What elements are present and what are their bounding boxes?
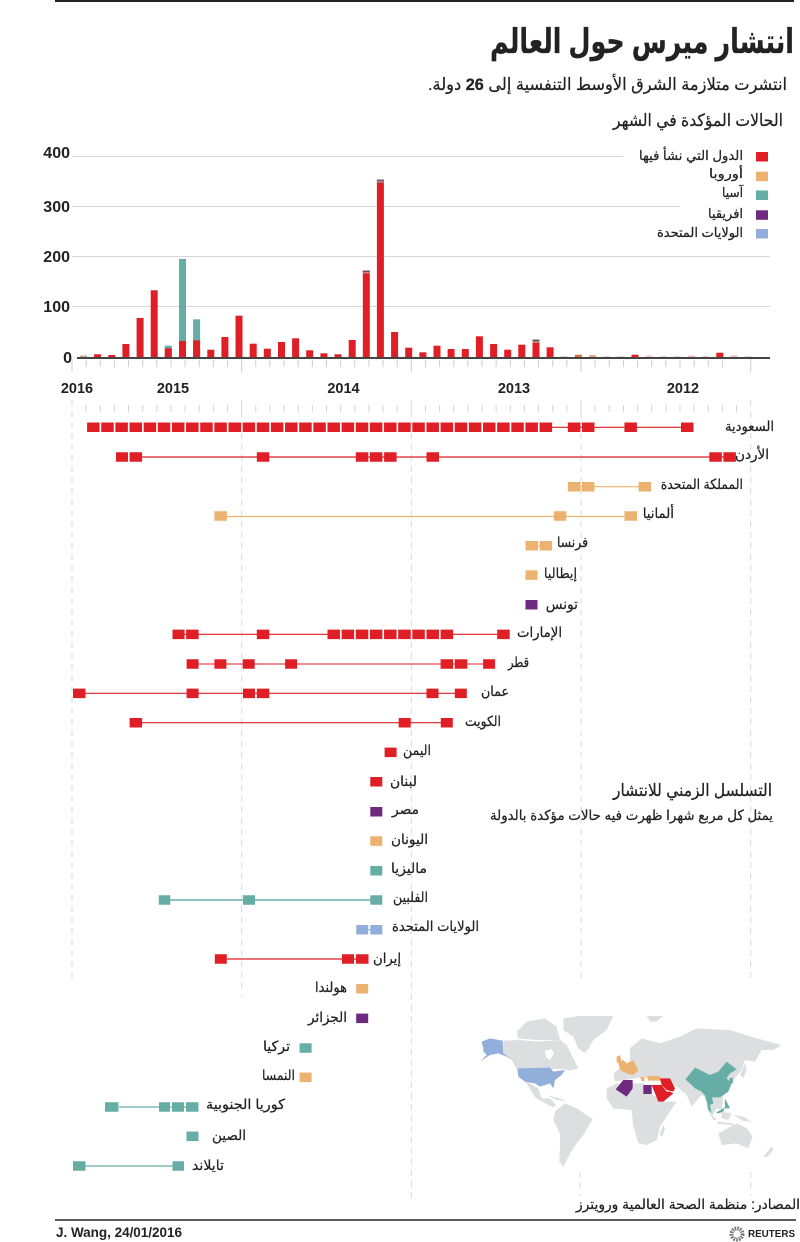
x axis baseline — [77, 357, 770, 359]
row: Saudi Arabia: السعودية — [725, 418, 774, 435]
row: South Korea — [105, 1096, 285, 1113]
year labels: 2016 — [61, 381, 93, 397]
panel: spread timeline — [72, 400, 774, 1200]
row: Kuwait: الكويت — [465, 713, 501, 730]
row: Greece: اليونان — [391, 831, 428, 848]
y axis labels: 300 — [43, 199, 70, 216]
chart heading: الحالات المؤكدة في الشهر — [612, 111, 783, 131]
row: South Korea: كوريا الجنوبية — [206, 1096, 285, 1113]
row: Malaysia: ماليزيا — [391, 860, 427, 877]
row: Qatar: قطر — [507, 654, 529, 671]
row: Netherlands: هولندا — [315, 979, 347, 996]
y axis labels: 100 — [43, 299, 70, 316]
row: United Kingdom — [568, 476, 743, 492]
row: Oman — [73, 683, 509, 699]
year labels: 2013 — [498, 381, 530, 397]
row: Egypt: مصر — [391, 801, 419, 818]
timeline explanation: يمثل كل مربع شهرا ظهرت فيه حالات مؤكدة بالدولة — [490, 807, 773, 824]
legend — [639, 146, 768, 241]
month ticks — [72, 359, 751, 372]
row: United States: الولايات المتحدة — [392, 918, 479, 935]
year labels: 2014 — [327, 381, 360, 397]
row: Iran: إيران — [373, 950, 401, 967]
row: Tunisia — [526, 596, 578, 613]
row: Tunisia: تونس — [546, 596, 578, 613]
legend: الولايات المتحدة — [657, 225, 743, 241]
y axis labels — [43, 145, 72, 367]
row: Germany — [214, 504, 674, 521]
sources: المصادر: منظمة الصحة العالمية ورويترز — [575, 1196, 800, 1213]
row: Italy — [526, 565, 577, 582]
row: Austria: النمسا — [262, 1067, 295, 1083]
legend: افريقيا — [708, 206, 743, 222]
y axis labels: 400 — [43, 145, 70, 162]
row: Philippines: الفلبين — [393, 889, 428, 906]
row: Yemen: اليمن — [403, 742, 431, 759]
y axis labels: 200 — [43, 249, 70, 266]
row: Lebanon: لبنان — [390, 773, 417, 789]
row: Thailand: تايلاند — [192, 1157, 224, 1173]
timeline heading: التسلسل الزمني للانتشار — [612, 781, 772, 801]
bar chart — [80, 180, 752, 357]
row: Jordan: الأردن — [735, 445, 769, 463]
row: Greece — [370, 831, 428, 848]
world map — [463, 1013, 787, 1170]
icon: Reuters logo: REUTERS — [748, 1229, 795, 1240]
row: Philippines — [159, 889, 428, 906]
year labels: 2015 — [157, 381, 189, 397]
row: Netherlands — [315, 979, 368, 996]
timeline ticks — [86, 405, 737, 412]
row: China — [186, 1127, 246, 1144]
credit: J. Wang, 24/01/2016 — [56, 1225, 182, 1240]
row: France — [526, 534, 588, 551]
row: Italy: إيطاليا — [544, 565, 577, 582]
year labels — [61, 381, 699, 397]
row: Qatar — [187, 654, 529, 671]
row: Thailand — [73, 1157, 224, 1173]
row: Saudi Arabia — [87, 418, 774, 435]
grid lines — [72, 156, 770, 306]
legend: أوروبا — [709, 165, 743, 182]
y axis labels: 0 — [63, 350, 72, 367]
row: Jordan — [116, 445, 769, 463]
legend: آسيا — [722, 184, 744, 200]
row: Kuwait — [130, 713, 501, 730]
row: Egypt — [370, 801, 419, 818]
row: Malaysia — [370, 860, 427, 877]
row: Iran — [215, 950, 401, 967]
row: Oman: عمان — [481, 683, 509, 699]
row: China: الصين — [212, 1127, 246, 1144]
row: UAE — [172, 624, 562, 641]
row: United Kingdom: المملكة المتحدة — [661, 476, 743, 492]
row: United States — [356, 918, 479, 935]
row: Turkey — [263, 1038, 312, 1055]
row: Algeria — [307, 1009, 368, 1026]
row: France: فرنسا — [557, 534, 588, 551]
legend: الدول التي نشأ فيها — [639, 146, 743, 164]
row: UAE: الإمارات — [517, 624, 562, 641]
row: Yemen — [385, 742, 431, 759]
row: Algeria: الجزائر — [307, 1009, 347, 1026]
year labels: 2012 — [667, 381, 699, 397]
row: Turkey: تركيا — [263, 1038, 290, 1055]
row: Germany: ألمانيا — [643, 504, 674, 521]
subtitle: انتشرت متلازمة الشرق الأوسط التنفسية إلى 26 دولة. — [428, 74, 787, 94]
panel: monthly confirmed cases chart — [43, 111, 783, 397]
row: Lebanon — [370, 773, 417, 789]
